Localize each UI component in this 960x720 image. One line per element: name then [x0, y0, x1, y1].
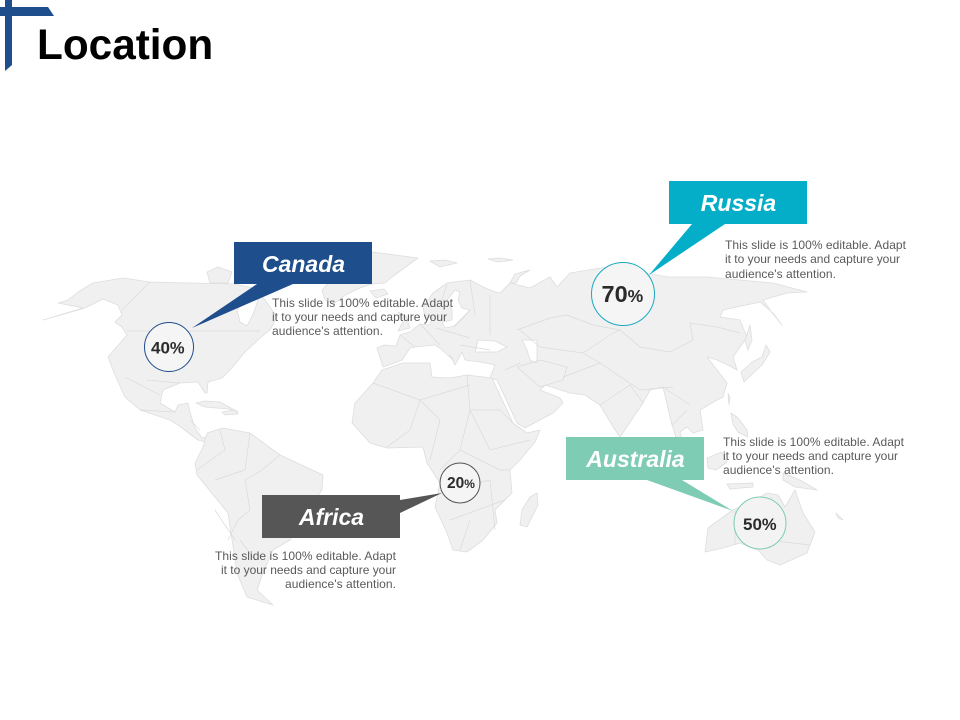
text block: Australia: This slide is 100% editable. Adapt [723, 435, 905, 449]
callout: Russia: Russia [701, 190, 776, 216]
callout: Africa: Africa [298, 504, 364, 530]
icon: header corner bars [0, 0, 54, 71]
circle: 70% [592, 262, 654, 326]
circle: 50% [734, 497, 786, 549]
circle: 20%: 20% [447, 475, 475, 492]
callout: Canada: Canada [262, 251, 345, 277]
circle: 40% [144, 322, 194, 372]
text block: Canada: This slide is 100% editable. Adapt [272, 296, 454, 310]
text block: Africa: This slide is 100% editable. Adapt [215, 549, 397, 563]
circle: 40%: 40% [151, 338, 185, 358]
text block: Australia [723, 435, 905, 477]
text block: Africa: it to your needs and capture your [221, 563, 396, 577]
title: Location [37, 21, 213, 68]
text block: Australia: audience's attention. [723, 463, 834, 477]
text block: Africa: audience's attention. [285, 577, 396, 591]
text block: Russia: audience's attention. [725, 267, 836, 281]
callout: Africa [262, 493, 442, 538]
callout: Canada [192, 242, 372, 328]
text block: Russia: it to your needs and capture your [725, 252, 900, 266]
callout: Australia [566, 437, 733, 511]
text block: Canada [272, 296, 454, 338]
circle: 70%: 70% [602, 281, 644, 307]
text block: Canada: audience's attention. [272, 324, 383, 338]
callout: Australia: Australia [585, 446, 685, 472]
text block: Australia: it to your needs and capture your [723, 449, 898, 463]
world map [43, 252, 843, 605]
text block: Africa [215, 549, 397, 591]
text block: Russia: This slide is 100% editable. Adapt [725, 238, 907, 252]
text block: Russia [725, 238, 907, 281]
circle: 20% [440, 463, 480, 503]
callout: Russia [649, 181, 807, 275]
circle: 50%: 50% [743, 515, 777, 534]
text block: Canada: it to your needs and capture your [272, 310, 447, 324]
